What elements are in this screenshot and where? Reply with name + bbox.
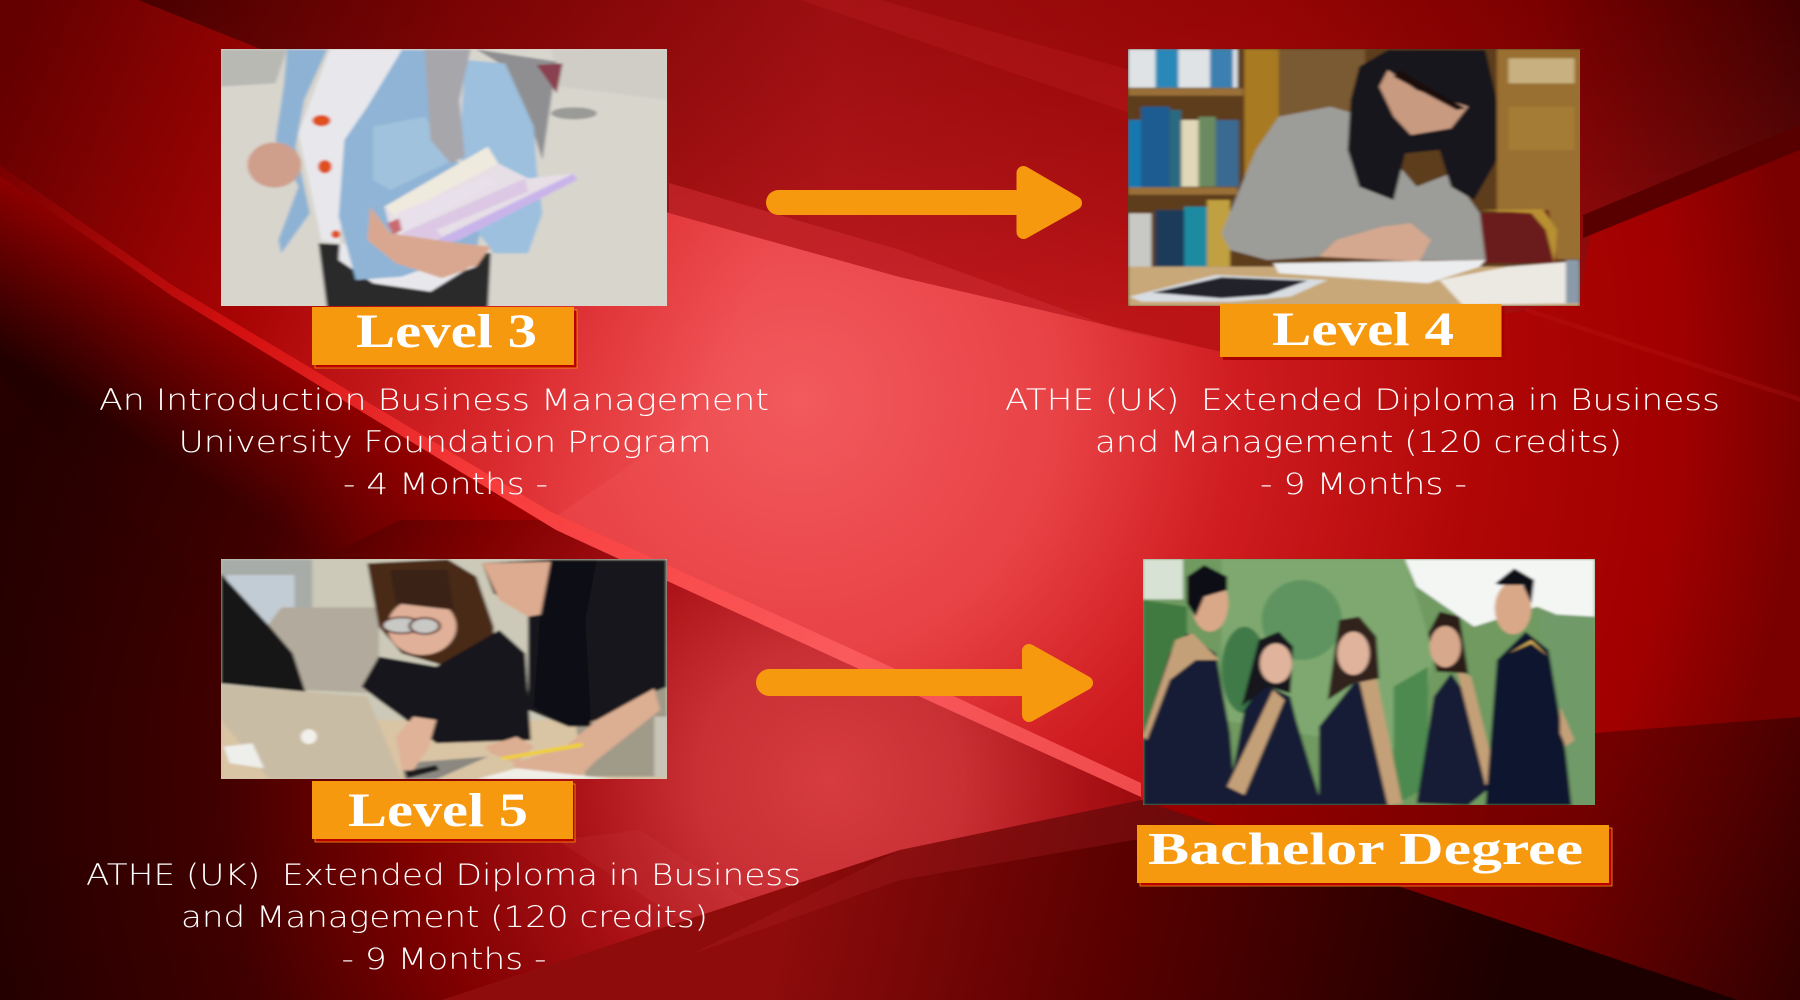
label: Level 4: Level 4 xyxy=(1272,303,1454,356)
label: Level 5 xyxy=(312,781,575,842)
photo: woman writing in library xyxy=(1121,47,1586,310)
text: level 5 description: - 9 Months - xyxy=(342,942,546,976)
photo: students at a laptop xyxy=(212,557,677,783)
text: level 5 description: ATHE (UK) Extended Diploma in Business xyxy=(86,858,801,892)
panel: level 3 xyxy=(99,47,769,501)
panel: bachelor degree xyxy=(1135,557,1612,886)
text: level 4 description: - 9 Months - xyxy=(1260,467,1467,501)
photo: student holding books xyxy=(212,47,677,310)
panel: level 5 xyxy=(86,557,801,976)
text: level 3 description: An Introduction Business Management xyxy=(99,383,769,417)
label: Bachelor Degree: Bachelor Degree xyxy=(1148,823,1583,874)
text: level 5 description xyxy=(86,858,801,976)
photo: five graduates in gowns xyxy=(1135,557,1600,810)
panel: level 4 xyxy=(1005,47,1720,501)
label: Level 4 xyxy=(1220,303,1504,360)
label: Bachelor Degree xyxy=(1137,823,1612,886)
label: Level 3: Level 3 xyxy=(356,305,537,358)
arrow: level 3 to level 4 xyxy=(766,173,1075,232)
label: Level 3 xyxy=(312,305,577,368)
label: Level 5: Level 5 xyxy=(348,784,528,837)
text: level 4 description: and Management (120 credits) xyxy=(1095,425,1622,459)
text: level 3 description: University Foundation Program xyxy=(178,425,712,459)
text: level 5 description: and Management (120 credits) xyxy=(181,900,708,934)
text: level 4 description xyxy=(1005,383,1720,501)
arrow: level 5 to bachelor degree xyxy=(756,651,1086,715)
text: level 4 description: ATHE (UK) Extended Diploma in Business xyxy=(1005,383,1720,417)
text: level 3 description xyxy=(99,383,769,501)
text: level 3 description: - 4 Months - xyxy=(343,467,548,501)
